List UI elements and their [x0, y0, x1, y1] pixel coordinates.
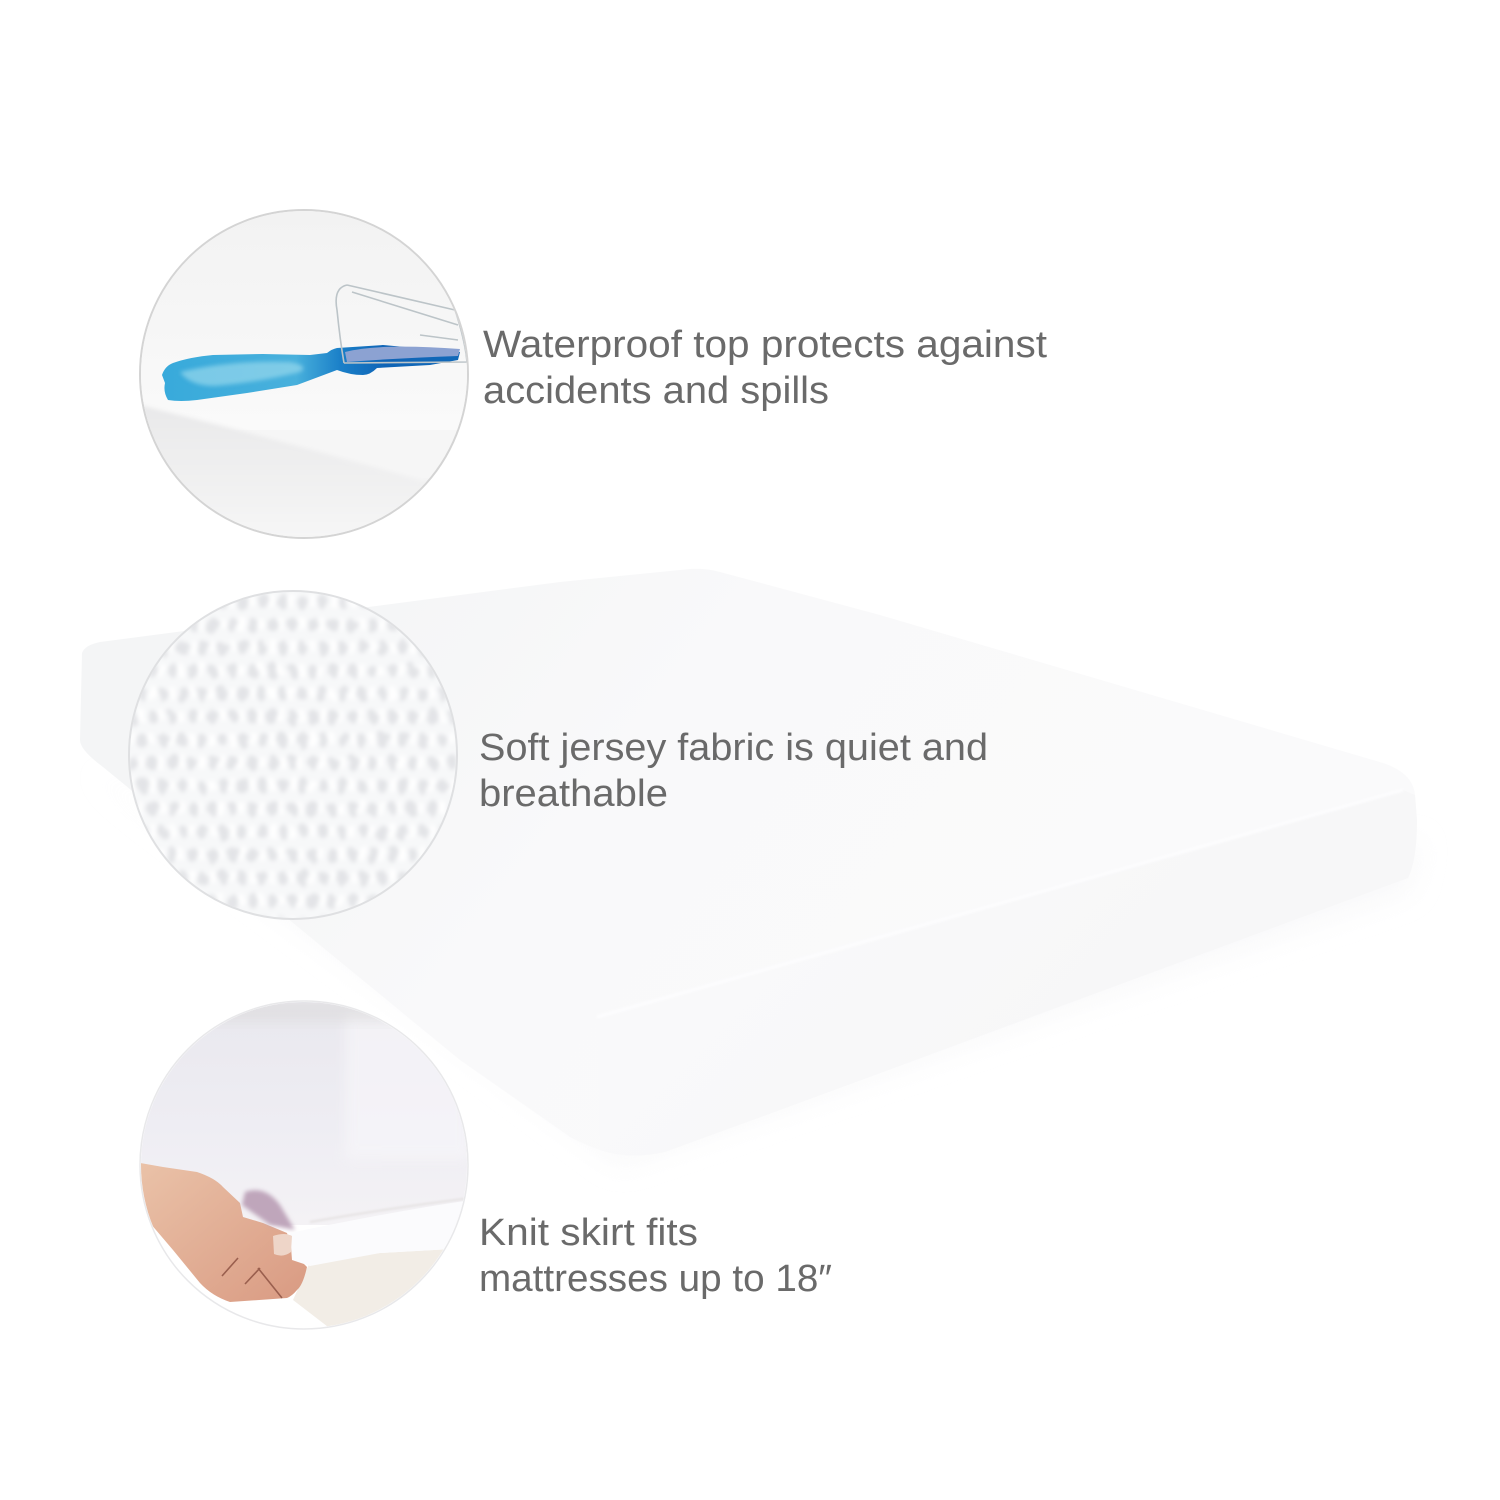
knit pattern	[129, 591, 457, 919]
hand	[140, 1163, 307, 1302]
circle: jersey fabric texture	[129, 591, 457, 919]
mattress core	[293, 1250, 444, 1326]
skirt hem line	[310, 1198, 470, 1222]
glass	[336, 285, 467, 363]
text: waterproof: accidents and spills	[483, 370, 829, 412]
finger shadow through fabric	[242, 1190, 295, 1230]
fabric lighter panel	[352, 1024, 414, 1072]
text: skirt: Knit skirt fits	[479, 1212, 698, 1254]
spill highlight	[180, 362, 303, 386]
thumbnail	[273, 1234, 292, 1256]
skirt fabric	[140, 1000, 470, 1225]
blue spill	[162, 345, 460, 401]
mattress	[80, 569, 1420, 1165]
text: jersey	[479, 727, 988, 815]
fabric top shading	[232, 1003, 382, 1022]
water in glass	[345, 347, 460, 362]
text: skirt	[479, 1212, 832, 1300]
circle: knit skirt and hand	[140, 1000, 470, 1340]
mattress body	[80, 569, 1417, 1156]
finger creases	[222, 1258, 282, 1298]
text: skirt: mattresses up to 18″	[479, 1258, 832, 1300]
mattress photo top surface	[140, 210, 470, 430]
mattress shadow	[90, 770, 1420, 1165]
mattress seam	[597, 790, 1403, 1017]
skirt hem	[290, 1200, 470, 1266]
text: waterproof: Waterproof top protects against	[483, 324, 1047, 366]
text: jersey: breathable	[479, 773, 668, 815]
mattress side panel	[597, 790, 1417, 1156]
circle: waterproof spill	[140, 210, 470, 540]
text: jersey: Soft jersey fabric is quiet and	[479, 727, 988, 769]
mattress photo side	[144, 406, 381, 537]
text: waterproof	[483, 324, 1047, 412]
